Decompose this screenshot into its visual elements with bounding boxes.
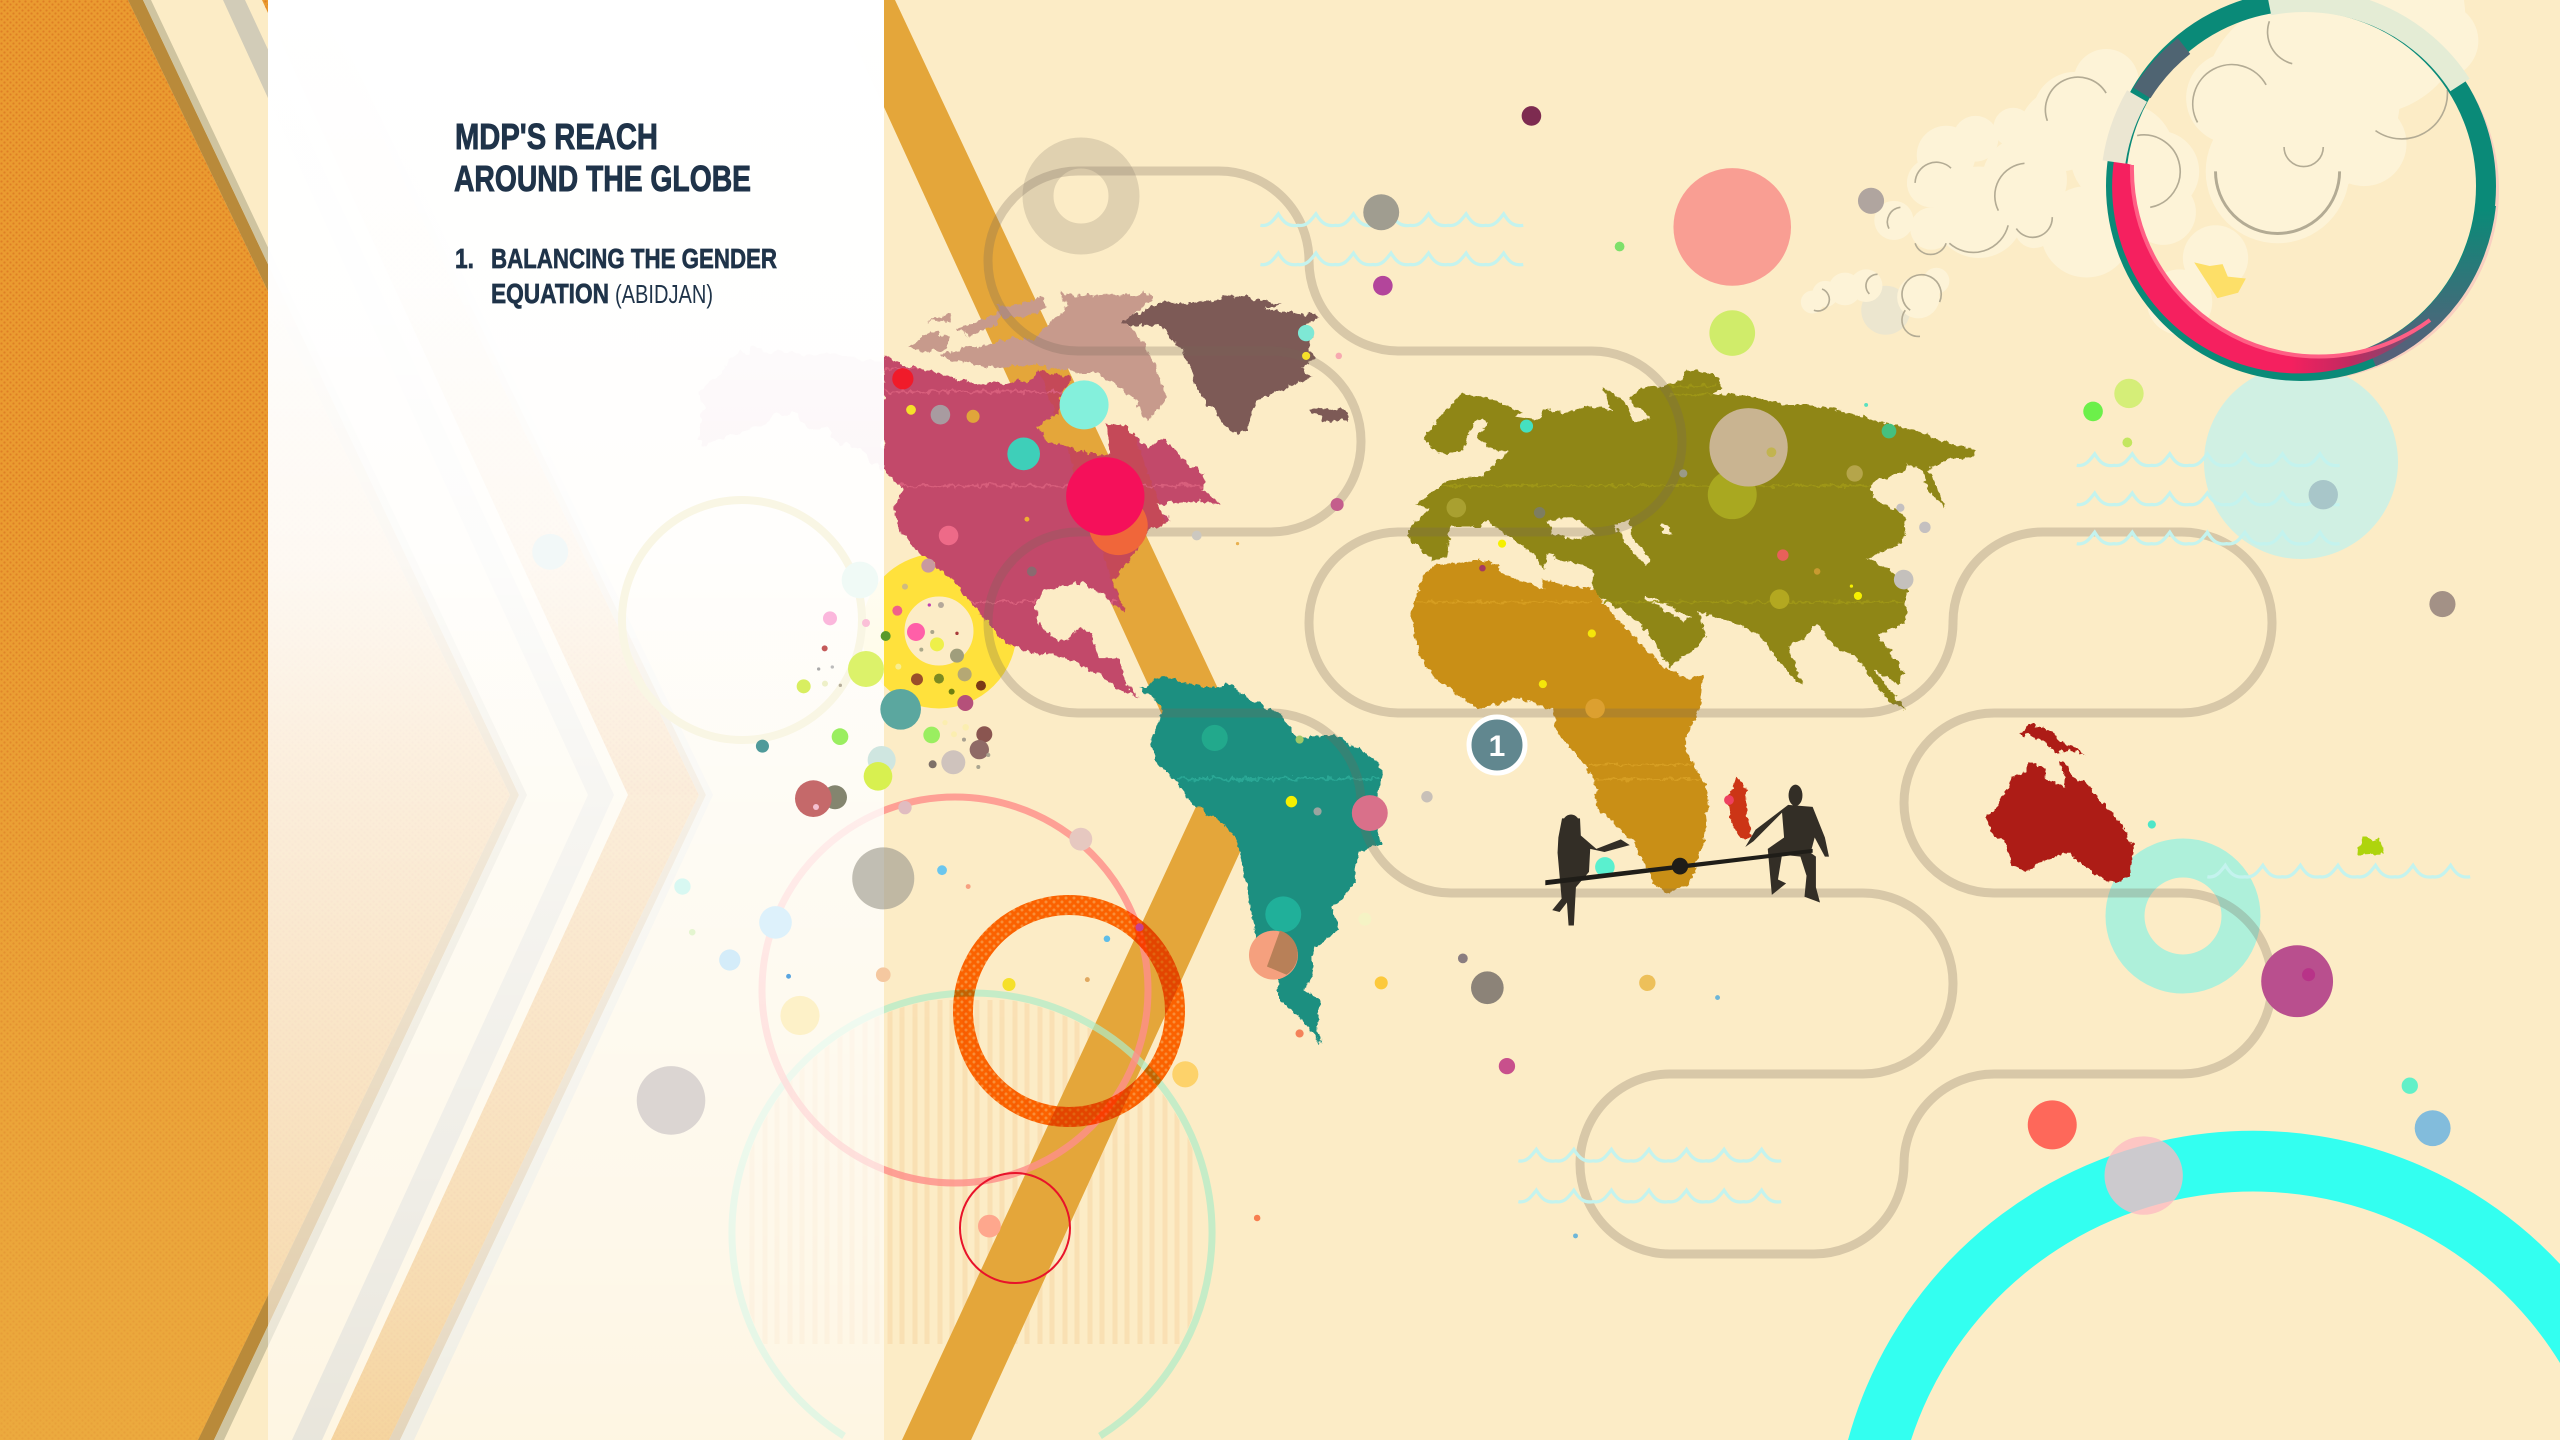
faint ghost ring in panel <box>622 500 862 740</box>
list item 1: 1. <box>455 243 474 274</box>
chevron stripes behind panel <box>0 0 713 1440</box>
map: New Zealand <box>2357 838 2384 854</box>
white translucent panel <box>268 0 884 1440</box>
diagonal orange band <box>835 0 1267 1440</box>
list item 1 <box>455 243 777 309</box>
location marker 1: 1 <box>1489 730 1505 763</box>
cyan arc <box>1848 1131 2560 1440</box>
title: AROUND THE GLOBE <box>454 158 751 199</box>
dot cluster near Central America <box>795 559 992 817</box>
list item 1: (ABIDJAN) <box>615 279 713 309</box>
location marker 1 <box>1469 717 1525 773</box>
map: Arctic islands <box>909 293 1167 421</box>
scattered dots <box>532 106 2456 1238</box>
woman silhouette <box>1552 814 1630 925</box>
top-right gradient ring <box>2112 1 2496 377</box>
map: Australia and New Guinea <box>1986 724 2134 884</box>
seesaw silhouettes <box>1545 785 1829 925</box>
winding road loop <box>988 171 2272 1254</box>
vertical stripes in circle <box>888 1000 1192 1344</box>
seesaw beam <box>1545 849 1813 885</box>
clouds <box>1801 0 2478 336</box>
map: Madagascar <box>1727 776 1753 839</box>
title <box>454 116 751 199</box>
map: Greenland and Iceland <box>1121 296 1347 436</box>
list item 1: EQUATION <box>491 278 609 309</box>
decorative rings <box>732 153 2398 1436</box>
title: MDP'S REACH <box>455 116 658 157</box>
map: Alaska ghost <box>700 350 884 470</box>
map: North America <box>884 355 1221 698</box>
man silhouette <box>1745 785 1829 902</box>
map: Africa <box>1411 560 1709 893</box>
map: South America <box>1140 676 1383 1043</box>
waves <box>1260 214 2470 1202</box>
yellow patch <box>2194 262 2246 298</box>
list item 1: BALANCING THE GENDER <box>491 243 777 274</box>
map: Eurasia <box>1409 369 1978 711</box>
